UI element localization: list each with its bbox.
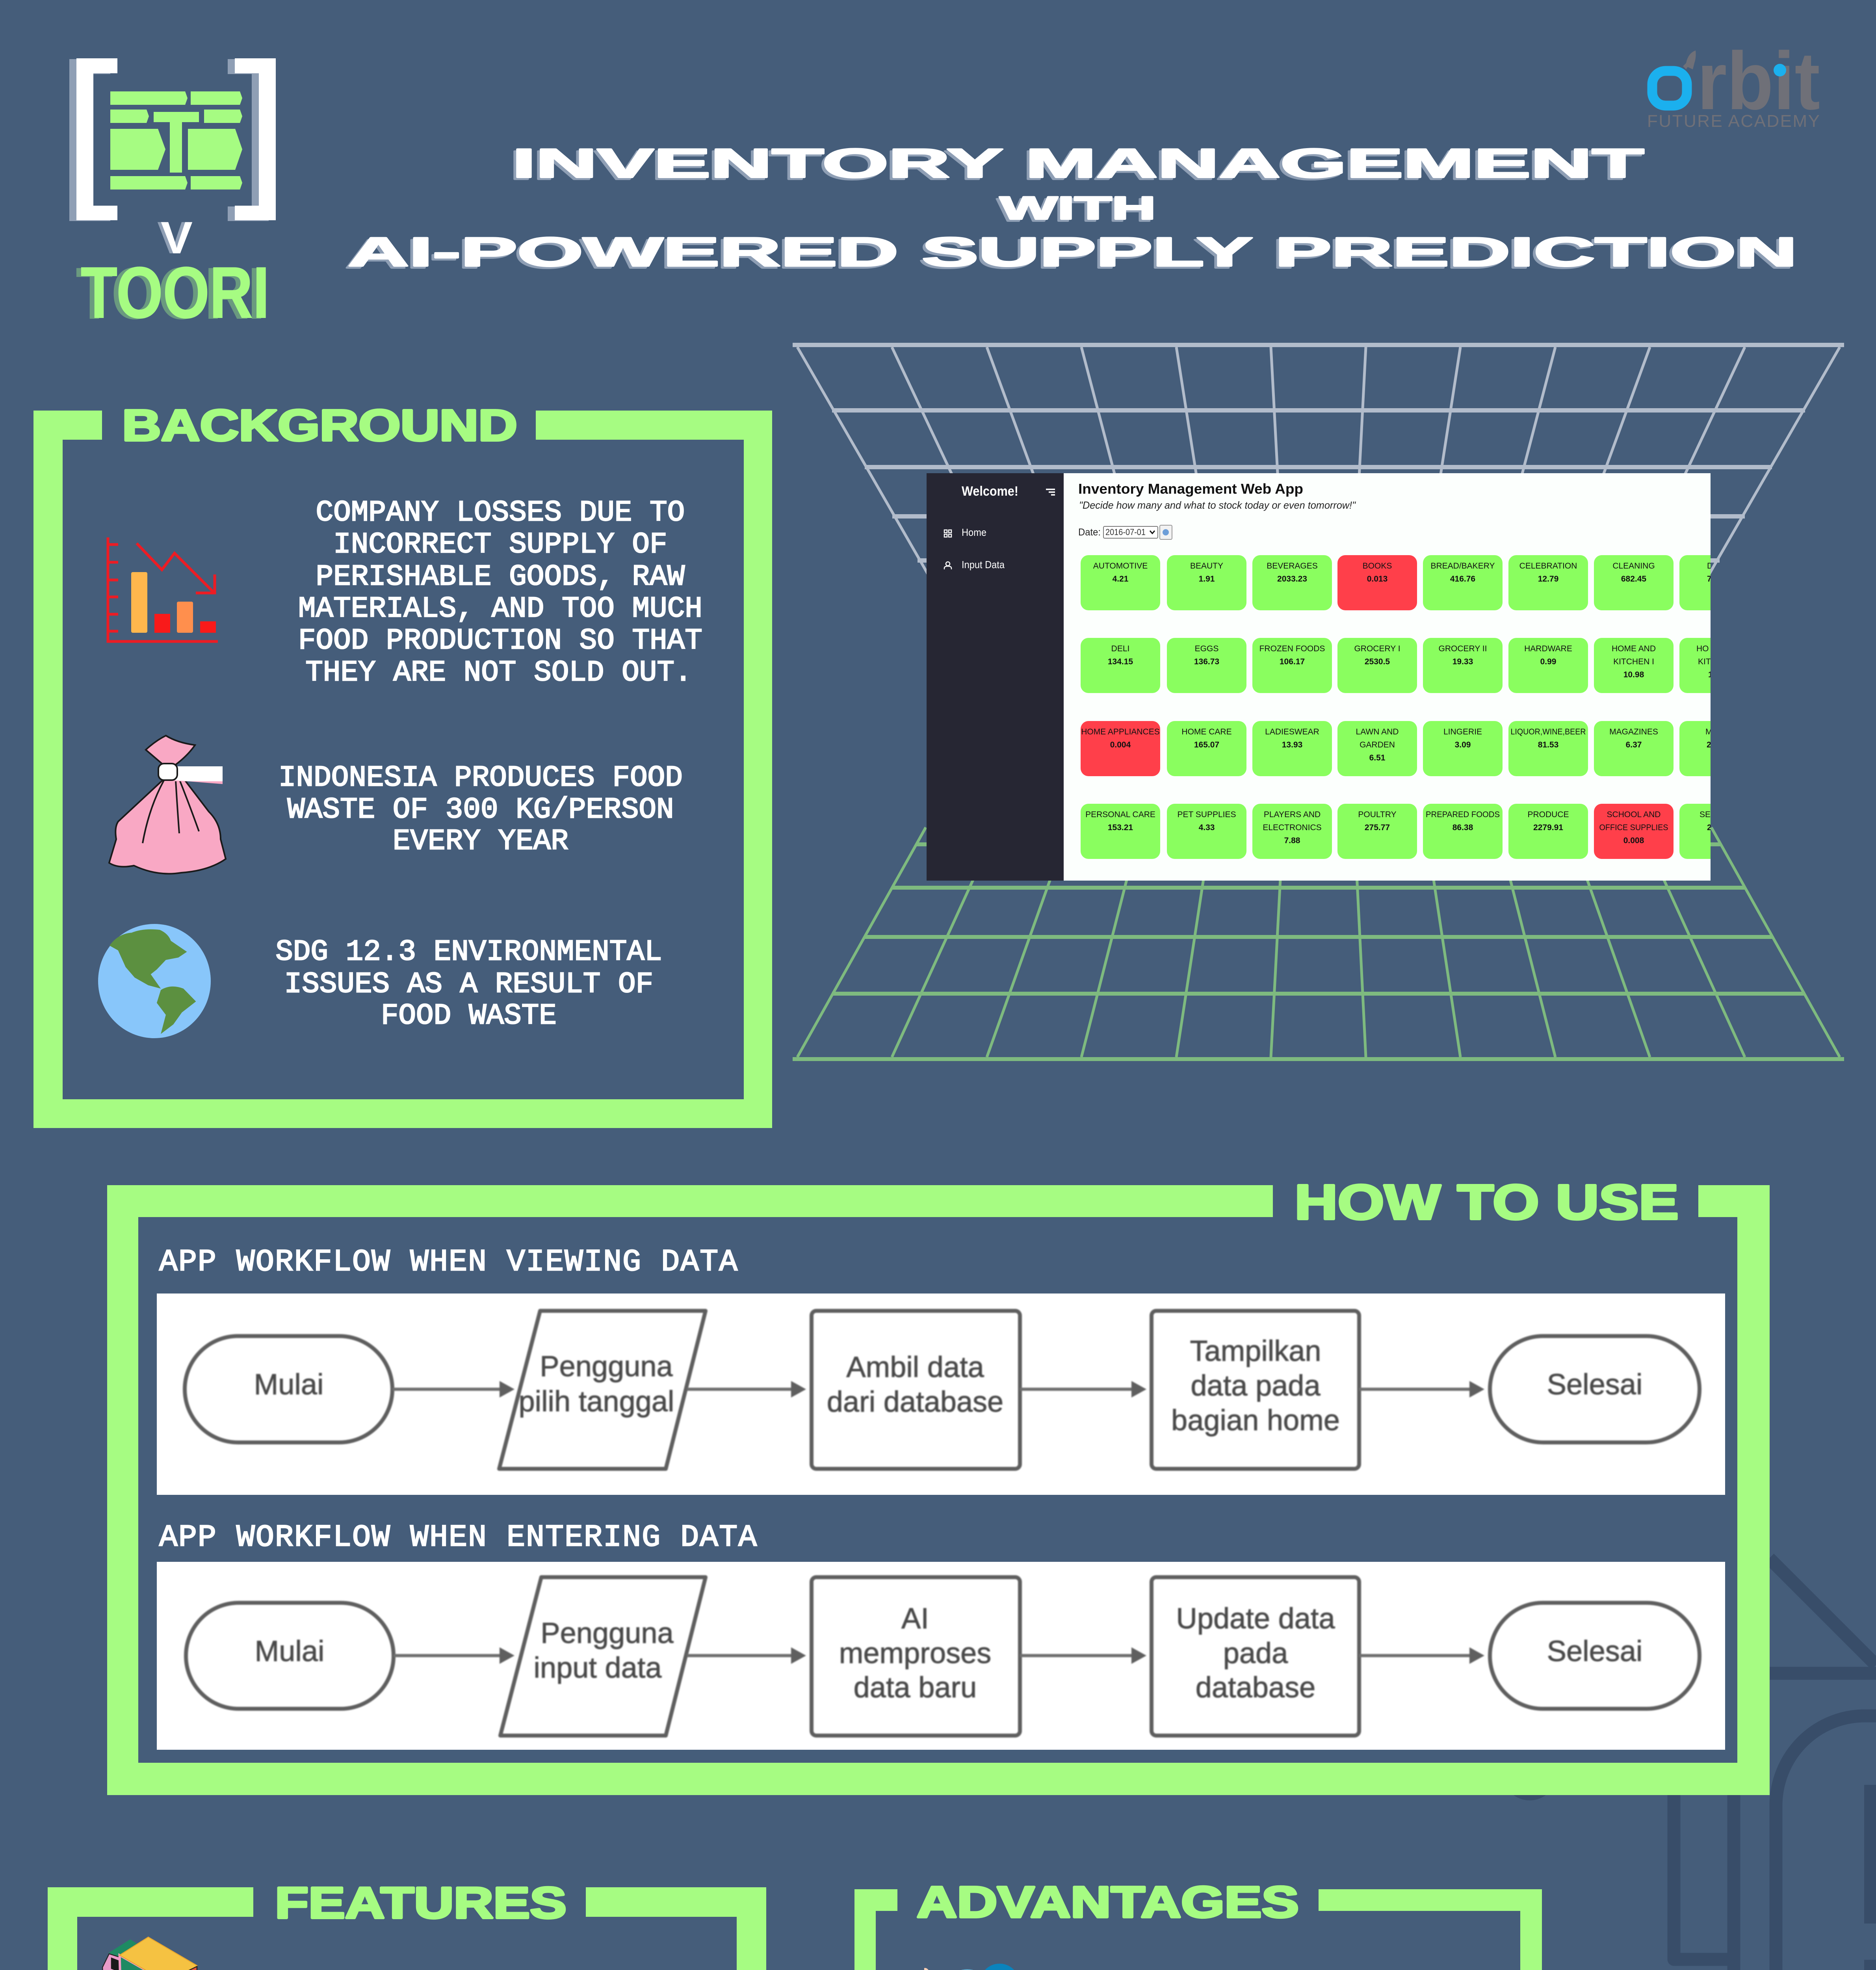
tile row 2: 136.73 [1194,657,1219,666]
flowchart: viewing data: Selesai [1547,1368,1642,1401]
icon: blue i dot [1774,64,1786,76]
tile row 1 [1081,555,1759,610]
tile row 4: SE [1700,810,1711,819]
logo: Orbit Future Academy [1647,35,1820,131]
label: entering workflow: APP WORKFLOW WHEN ENTERING DATA [159,1520,758,1555]
panel frame [48,1887,766,1970]
flowchart: viewing data: bagian home [1171,1404,1340,1437]
tile row 3: HOME APPLIANCES [1081,727,1160,736]
tile row 2: FROZEN FOODS [1259,644,1325,653]
logo: Toori [76,58,276,333]
tile row 2: 10.98 [1623,670,1644,679]
tile row 3 [1081,721,1759,776]
tile row 1: 682.45 [1621,574,1646,584]
icon: globe [98,924,211,1038]
label: viewing workflow: APP WORKFLOW WHEN VIEWING DATA [159,1245,738,1280]
icon: home grid [944,530,951,537]
flowchart: viewing data: Mulai [254,1368,323,1401]
tile row 2: GROCERY I [1354,644,1400,653]
tile row 4: ELECTRONICS [1263,823,1322,832]
tile row 2: 1 [1708,670,1713,679]
icon: garbage bag in hand [109,736,226,874]
tile row 1: AUTOMOTIVE [1093,561,1148,571]
title [348,141,1797,275]
icon: logo green blocks [110,91,242,190]
tile row 1: BEAUTY [1190,561,1223,571]
tile row 4: PRODUCE [1527,810,1569,819]
tile row 3: LAWN AND [1356,727,1399,736]
tile row 2: 0.99 [1540,657,1556,666]
tile row 4: PLAYERS AND [1264,810,1321,819]
flowchart: viewing data: Pengguna [540,1350,673,1383]
tile row 4: 7.88 [1284,836,1300,845]
text: company losses [298,496,702,690]
app sidebar: Welcome! [962,484,1018,499]
flowchart: viewing data: Tampilkan [1190,1334,1321,1367]
panel interior [138,1217,1737,1763]
icon: user [944,562,951,569]
tile row 1: 0.013 [1367,574,1387,584]
heading: how to use: HOW TO USE [1295,1175,1679,1230]
tile row 4: 0.008 [1623,836,1644,845]
app tagline: "Decide how many and what to stock today or even tomorrow!" [1079,499,1356,511]
tile row 2 [1081,638,1759,693]
panel frame [33,411,772,1128]
flowchart: entering data: Mulai [255,1635,324,1667]
date selector: Date: [1078,527,1101,538]
flowchart: entering data: Pengguna [541,1617,674,1649]
tile row 4: 2279.91 [1533,823,1563,832]
app screenshot [927,473,1759,881]
tile row 2: 106.17 [1280,657,1305,666]
heading: features: FEATURES [275,1878,567,1927]
tile row 3: 2 [1707,740,1711,749]
icon: falling sales chart [108,537,218,641]
flowchart: entering data: AI [901,1602,929,1635]
tile row 3: LADIESWEAR [1265,727,1319,736]
tile row 2: EGGS [1195,644,1218,653]
tile row 1: 2033.23 [1277,574,1307,584]
title: AI-POWERED SUPPLY PREDICTION [348,229,1797,275]
text: sdg: ISSUES AS A RESULT OF [284,968,653,1001]
background circuit pattern [1509,1558,1876,1970]
flowchart: viewing data: data pada [1191,1369,1321,1402]
panel: features [48,1878,766,1970]
text: indonesia food waste [279,762,683,858]
icon: logo brackets [76,58,276,220]
tile row 4: PREPARED FOODS [1426,810,1500,819]
flowchart: entering data: Selesai [1547,1635,1642,1667]
tile row 2: HARDWARE [1524,644,1572,653]
tile row 2: 134.15 [1108,657,1133,666]
app heading: Inventory Management Web App [1078,481,1303,497]
tile row 1: BREAD/BAKERY [1430,561,1495,571]
app sidebar [927,473,1064,881]
tile row 1: D [1707,561,1713,571]
tile row 2: 2530.5 [1365,657,1390,666]
tile row 2: KIT [1698,657,1711,666]
flowchart: entering data: pada [1223,1637,1288,1669]
icon: menu [1046,489,1055,495]
flowchart: entering data: memproses [839,1637,991,1669]
tile row 4: 153.21 [1108,823,1133,832]
icon: rocket [1683,50,1696,69]
tile row 3: MAGAZINES [1609,727,1658,736]
panel frame [107,1185,1770,1795]
tile row 1: 4.21 [1113,574,1129,584]
tile row 4: 86.38 [1453,823,1473,832]
tile row 3: 165.07 [1194,740,1219,749]
flowchart: entering data [157,1562,1725,1750]
tile row 4: OFFICE SUPPLIES [1599,823,1668,832]
tile row 3: 81.53 [1538,740,1558,749]
text: company losses: PERISHABLE GOODS, RAW [316,561,685,594]
tile row 1: 7 [1707,574,1712,584]
flowchart: viewing data: pilih tanggal [519,1385,674,1418]
tile row 3: LINGERIE [1443,727,1482,736]
heading: background: BACKGROUND [122,401,517,450]
flowchart: entering data: input data [533,1651,662,1684]
text: sdg: FOOD WASTE [381,1000,557,1033]
tile row 4: 275.77 [1365,823,1390,832]
panel: advantages [854,1877,1542,1970]
flowchart: viewing data [157,1294,1725,1495]
flowchart: entering data: database [1196,1671,1315,1704]
text: indonesia food waste: INDONESIA PRODUCES FOOD [279,762,683,795]
text: company losses: THEY ARE NOT SOLD OUT. [305,656,692,690]
future academy text: FUTURE ACADEMY [1647,112,1820,131]
text: company losses: INCORRECT SUPPLY OF [333,528,667,561]
logo letter V: V [161,213,193,263]
tile row 3: GARDEN [1360,740,1395,749]
tile row 4: SCHOOL AND [1607,810,1661,819]
orbit wordmark: rbit [1697,35,1820,127]
panel: background [33,401,772,1128]
heading: advantages: ADVANTAGES [917,1877,1299,1927]
tile row 1: BOOKS [1363,561,1392,571]
tile row 3: HOME CARE [1181,727,1232,736]
tile row 2: DELI [1111,644,1129,653]
flowchart: entering data: Update data [1176,1602,1335,1635]
tile row 3: 6.51 [1369,753,1386,762]
flowchart: entering data: data baru [854,1671,977,1704]
tile row 1: 1.91 [1199,574,1215,584]
tile row 1: CELEBRATION [1519,561,1577,571]
panel frame [854,1889,1542,1970]
text: company losses: MATERIALS, AND TOO MUCH [298,593,702,626]
flowchart: viewing data: Ambil data [846,1351,984,1383]
tile row 4 [1081,804,1759,859]
tile row 4: PERSONAL CARE [1085,810,1155,819]
text: indonesia food waste: EVERY YEAR [393,825,568,858]
tile row 4: 4.33 [1199,823,1215,832]
tile row 2: HO [1696,644,1709,653]
text: indonesia food waste: WASTE OF 300 KG/PERSON [287,794,674,827]
app sidebar: Input Data [962,559,1005,571]
text: company losses: FOOD PRODUCTION SO THAT [298,624,702,658]
tile row 3: 3.09 [1455,740,1471,749]
tile row 2: GROCERY II [1439,644,1487,653]
date selector: 2016-07-01 [1105,527,1146,537]
tile row 1: BEVERAGES [1267,561,1318,571]
icon: delivery truck [102,1937,197,1970]
tile row 4: POULTRY [1358,810,1397,819]
tile row 1: 416.76 [1450,574,1475,584]
text: sdg [275,936,662,1033]
tile row 2: 19.33 [1453,657,1473,666]
tile row 3: 6.37 [1626,740,1642,749]
flowchart: viewing data: dari database [827,1385,1003,1418]
title: INVENTORY MANAGEMENT [512,141,1644,186]
tile row 2: HOME AND [1612,644,1656,653]
tile row 3: 13.93 [1282,740,1302,749]
icon: effective and efficient [916,1964,1019,1970]
tile row 1: 12.79 [1538,574,1558,584]
logo wordmark TOORI: TOORI [81,252,269,333]
text: company losses: COMPANY LOSSES DUE TO [316,496,685,530]
app sidebar: Home [962,526,986,538]
title: WITH [1000,190,1156,226]
icon: orbit letter o ring [1652,71,1687,106]
tile row 4: PET SUPPLIES [1177,810,1236,819]
panel: how to use [107,1175,1770,1795]
tile row 4: 2 [1707,823,1712,832]
wireframe: bottom green perspective grid [793,827,1844,1061]
tile row 3: M [1705,727,1712,736]
wireframe: top gray perspective grid [793,343,1844,591]
tile row 1: CLEANING [1612,561,1655,571]
text: sdg: SDG 12.3 ENVIRONMENTAL [275,936,662,969]
date selector [1078,525,1172,539]
tile row 2: KITCHEN I [1613,657,1654,666]
tile row 3: LIQUOR,WINE,BEER [1510,727,1586,736]
tile row 3: 0.004 [1110,740,1131,749]
